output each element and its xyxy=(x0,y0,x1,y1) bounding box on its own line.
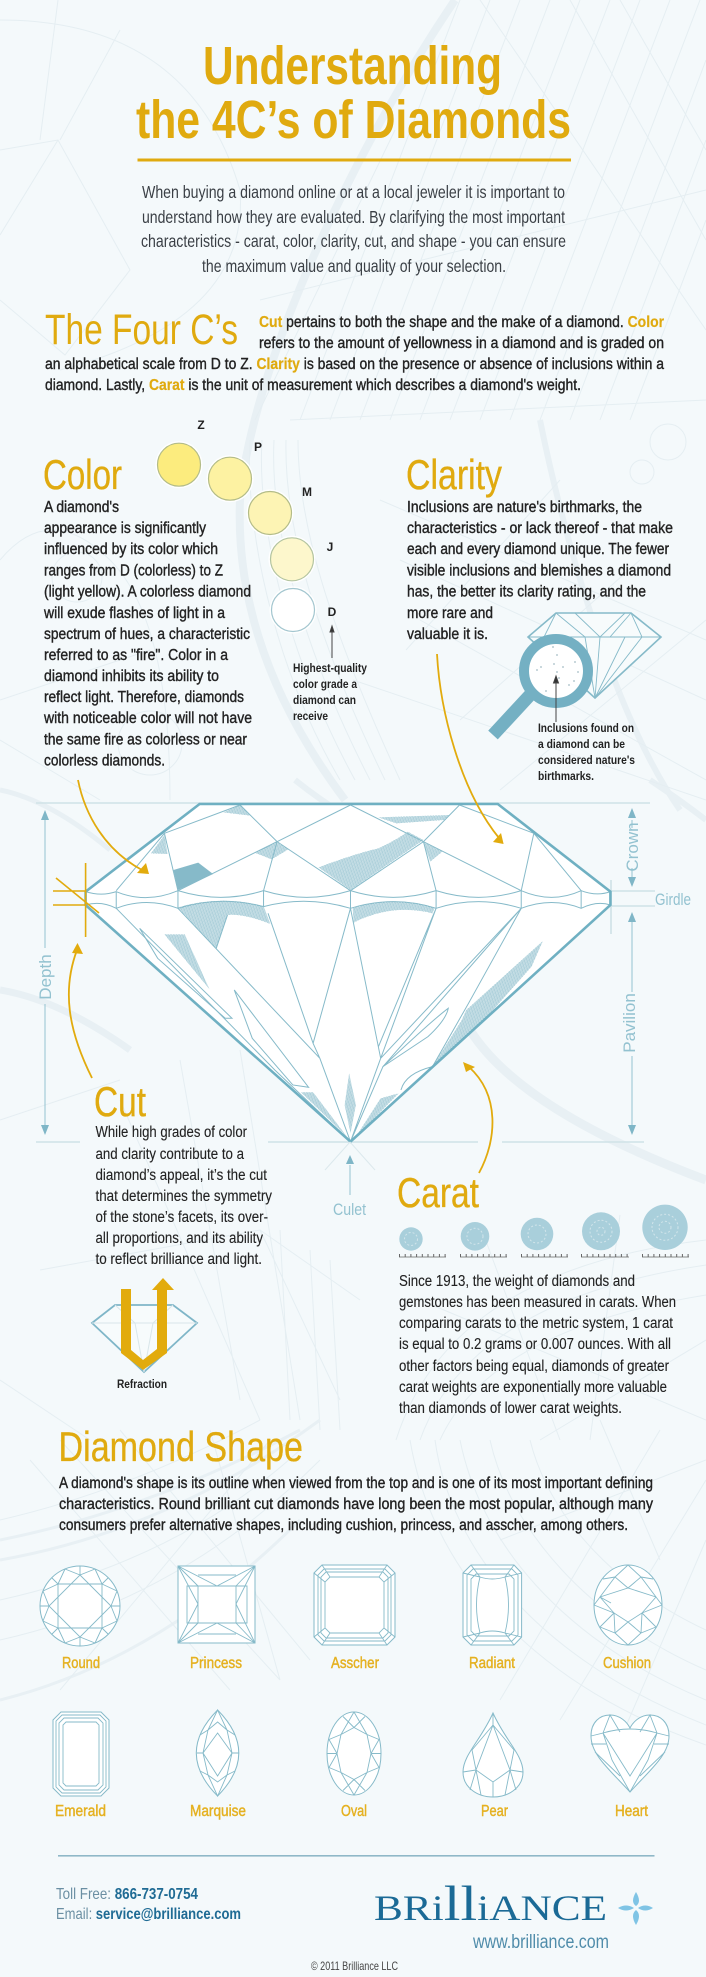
shape labels row one: Radiant xyxy=(469,1655,516,1672)
shape: princess xyxy=(178,1566,255,1643)
title xyxy=(136,36,571,150)
clarity text: valuable it is. xyxy=(407,626,488,643)
arrow: cut to diamond xyxy=(69,943,92,1078)
logo: brilliance: BRilliANCE xyxy=(374,1875,607,1931)
shape labels row one: Princess xyxy=(190,1655,242,1672)
color grade letters: D xyxy=(328,605,337,619)
panel: diamond shape xyxy=(40,1423,669,1820)
caption: highest-quality color grade: color grade a xyxy=(293,677,357,691)
shape labels row one xyxy=(62,1655,651,1672)
panel: clarity xyxy=(406,451,673,783)
color text: A diamond's xyxy=(44,499,119,516)
carat rulers xyxy=(399,1256,690,1257)
diamond shape text xyxy=(59,1475,653,1534)
color text: colorless diamonds. xyxy=(44,752,165,770)
shape labels row one: Round xyxy=(62,1655,100,1672)
cut text: all proportions, and its ability xyxy=(96,1230,263,1247)
shape: round xyxy=(40,1566,120,1646)
clarity text: has, the better its clarity rating, and the xyxy=(407,584,646,600)
cut text: that determines the symmetry xyxy=(96,1188,272,1205)
title: Understanding xyxy=(203,36,502,96)
four c's text: refers to the amount of yellowness in a diamond and is graded on xyxy=(259,335,664,352)
carat size stones xyxy=(399,1205,688,1251)
shape: emerald xyxy=(53,1712,109,1796)
panel: large diamond diagram xyxy=(36,803,691,1219)
color grade letters: M xyxy=(302,485,312,499)
icon: logo star xyxy=(618,1892,653,1925)
shape labels row two: Emerald xyxy=(55,1803,106,1820)
cut text xyxy=(96,1124,272,1268)
dimension: depth xyxy=(36,810,55,1135)
caption: inclusions xyxy=(538,721,635,783)
carat text: carat weights are exponentially more valuable xyxy=(399,1379,667,1396)
heading: diamond shape: Diamond Shape xyxy=(58,1423,303,1470)
intro text: When buying a diamond online or at a local jeweler it is important to xyxy=(142,182,565,202)
carat text: than diamonds of lower carat weights. xyxy=(399,1400,622,1417)
color text: reflect light. Therefore, diamonds xyxy=(44,689,244,706)
caption: inclusions: birthmarks. xyxy=(538,769,594,783)
shape labels row two: Pear xyxy=(481,1803,508,1820)
arrow: carat to diamond xyxy=(463,1062,492,1173)
contact details xyxy=(56,1886,241,1923)
four c's text xyxy=(45,314,664,394)
intro text: characteristics - carat, color, clarity, cut, and shape - you can ensure xyxy=(141,231,566,251)
shape: asscher xyxy=(314,1565,395,1645)
color scale circles xyxy=(156,441,316,634)
clarity text xyxy=(407,499,673,643)
caption: highest-quality color grade: Highest-quality xyxy=(293,661,367,675)
shape: heart xyxy=(591,1715,669,1792)
arrow: inclusion pointer xyxy=(554,676,558,722)
shape labels row two: Oval xyxy=(341,1803,367,1820)
cut text: diamond’s appeal, it’s the cut xyxy=(96,1167,268,1184)
caption: inclusions: considered nature's xyxy=(538,753,635,767)
color grade letters: P xyxy=(254,440,262,454)
color text: (light yellow). A colorless diamond xyxy=(44,584,251,600)
intro text: the maximum value and quality of your selection. xyxy=(202,256,506,276)
shape labels row two: Marquise xyxy=(190,1803,246,1820)
clarity text: visible inclusions and blemishes a diamond xyxy=(407,562,671,580)
title: the 4C’s of Diamonds xyxy=(136,90,571,150)
shape labels row one: Cushion xyxy=(603,1655,651,1672)
color grade letters: Z xyxy=(197,418,205,432)
clarity text: characteristics - or lack thereof - that make xyxy=(407,520,673,537)
color text: referred to as "fire". Color in a xyxy=(44,647,228,664)
dimension: depth: Depth xyxy=(36,954,55,1000)
four c's text: an alphabetical scale from D to Z. Clarity is based on the presence or absence of inclusions within a xyxy=(45,356,664,373)
panel: the four c's xyxy=(45,306,664,394)
color text: with noticeable color will not have xyxy=(43,710,252,727)
guide lines xyxy=(36,803,655,1142)
shape labels row two: Heart xyxy=(615,1803,649,1820)
panel: color xyxy=(43,418,367,770)
arrow: highest grade xyxy=(330,626,334,658)
four c's text: Cut pertains to both the shape and the make of a diamond. Color xyxy=(259,314,664,331)
shape labels row two xyxy=(55,1803,649,1820)
shape: oval xyxy=(327,1712,381,1795)
four c's text: diamond. Lastly, Carat is the unit of measurement which describes a diamond's weight. xyxy=(45,377,581,394)
intro text: understand how they are evaluated. By clarifying the most important xyxy=(142,207,565,227)
color text: the same fire as colorless or near xyxy=(44,732,247,748)
shape labels row one: Asscher xyxy=(331,1655,379,1672)
arrow: clarity to diamond xyxy=(437,654,504,844)
icon: magnifying glass xyxy=(493,639,588,735)
dimension: crown xyxy=(623,808,642,887)
diamond shape text: consumers prefer alternative shapes, including cushion, princess, and asscher, among others. xyxy=(59,1517,628,1534)
caption: highest-quality color grade: diamond can xyxy=(293,693,356,707)
caption: highest-quality color grade: receive xyxy=(293,709,328,723)
color text: ranges from D (colorless) to Z xyxy=(44,562,223,580)
dimension: pavilion: Pavilion xyxy=(620,993,639,1053)
caption: inclusions: Inclusions found on xyxy=(538,721,634,735)
arrow: color to diamond xyxy=(78,780,149,874)
cut text: to reflect brilliance and light. xyxy=(96,1251,262,1268)
shape: radiant xyxy=(463,1565,522,1645)
label: culet: Culet xyxy=(333,1200,366,1219)
heading: color: Color xyxy=(43,451,122,498)
dimension: crown: Crown xyxy=(623,822,642,872)
heading: carat: Carat xyxy=(397,1169,479,1216)
diamond shape text: characteristics. Round brilliant cut diamonds have long been the most popular, although many xyxy=(59,1496,653,1513)
copyright: © 2011 Brilliance LLC xyxy=(311,1959,398,1973)
diamond facets xyxy=(86,804,610,1142)
contact details: Email: service@brilliance.com xyxy=(56,1906,241,1923)
clarity text: Inclusions are nature's birthmarks, the xyxy=(407,499,642,516)
heading: the four c's: The Four C’s xyxy=(45,306,238,354)
color text: spectrum of hues, a characteristic xyxy=(44,626,250,643)
heading: clarity: Clarity xyxy=(406,451,502,498)
color text: will exude flashes of light in a xyxy=(43,605,225,622)
cut text: and clarity contribute to a xyxy=(96,1146,244,1163)
icon: small diamond xyxy=(528,613,661,698)
carat text: Since 1913, the weight of diamonds and xyxy=(399,1273,635,1290)
website: www.brilliance.com xyxy=(472,1932,609,1953)
label: girdle: Girdle xyxy=(655,890,691,909)
shape: pear xyxy=(463,1713,523,1797)
shape: cushion xyxy=(594,1565,662,1645)
shape: marquise xyxy=(196,1710,239,1796)
intro text xyxy=(141,182,566,276)
caption: refraction: Refraction xyxy=(117,1377,167,1391)
clarity text: more rare and xyxy=(407,605,493,622)
clarity text: each and every diamond unique. The fewer xyxy=(407,541,669,558)
icon: refraction diamond xyxy=(92,1278,197,1372)
color text xyxy=(43,499,252,770)
title rule xyxy=(138,158,571,162)
gold crosshair marker xyxy=(53,863,99,937)
heading: cut: Cut xyxy=(94,1078,146,1125)
color grade letters xyxy=(197,418,337,619)
cut text: While high grades of color xyxy=(96,1124,247,1141)
color text: appearance is significantly xyxy=(44,520,206,537)
footer rule xyxy=(58,1855,654,1857)
color grade letters: J xyxy=(327,540,333,554)
dimension: pavilion xyxy=(620,912,639,1135)
carat text xyxy=(399,1273,676,1417)
caption: inclusions: a diamond can be xyxy=(538,737,625,751)
cut text: of the stone’s facets, its over- xyxy=(96,1209,268,1226)
panel: cut xyxy=(92,1078,272,1391)
panel: carat xyxy=(397,1169,690,1417)
caption: highest-quality color grade xyxy=(293,661,367,723)
contact details: Toll Free: 866-737-0754 xyxy=(56,1886,198,1903)
color text: influenced by its color which xyxy=(44,541,218,558)
label: culet xyxy=(325,1142,375,1219)
color text: diamond inhibits its ability to xyxy=(44,668,219,685)
